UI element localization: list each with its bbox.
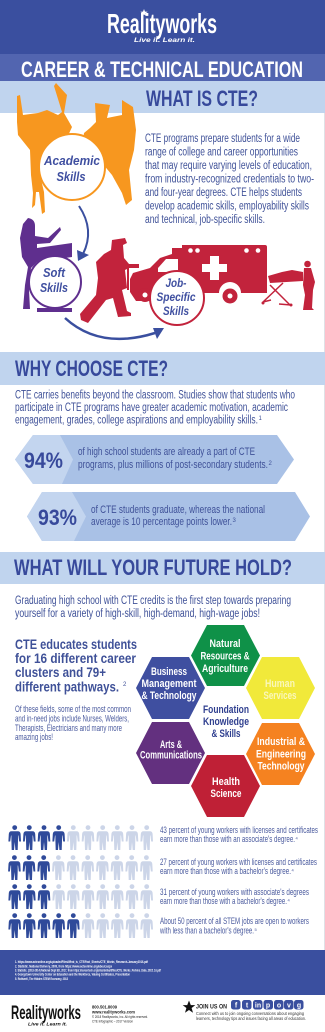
stat: 94 percent: 94% (24, 448, 63, 473)
footer references band: 3. Statistic. (2013-2014) National Dept ED, 2017, from https://careertech.org/sites/default/files/CTE_Works_Perkins_Data_2015_16.pdf (15, 968, 161, 972)
arrow: academic to soft (77, 206, 89, 261)
circle: soft skills (29, 256, 81, 308)
circle: job-specific skills: Skills (163, 306, 189, 318)
hexagon: human services: Human (265, 678, 295, 690)
section heading: why choose CTE (0, 352, 325, 385)
callout: career clusters: CTE educates students (15, 637, 137, 652)
stat: 93 percent: of CTE students graduate, whereas the national (91, 504, 265, 516)
text: what is CTE description: and technical, job-specific skills. (145, 214, 265, 226)
hexagon: natural resources: Agriculture (202, 663, 248, 675)
join us on social row: p (266, 1002, 270, 1010)
pictogram row: 31 percent (8, 884, 153, 909)
text: in-demand jobs note: and in-need jobs include Nurses, Welders, (15, 714, 129, 724)
label: foundation knowledge and skills: Foundation (203, 704, 249, 716)
circle: job-specific skills: Specific (156, 292, 196, 304)
circle: soft skills: Skills (40, 280, 68, 295)
join us on social row: t (246, 1002, 249, 1010)
circle: soft skills: Soft (43, 265, 66, 280)
text: 50 percent statistic: 5 (254, 927, 258, 932)
text: in-demand jobs note: Of these fields, some of the most common (15, 704, 131, 715)
join us on social row: g (297, 1002, 301, 1010)
icon: firefighter silhouette (80, 238, 139, 323)
hexagon: natural resources (191, 625, 260, 686)
hexagon: industrial and engineering (246, 723, 315, 785)
section heading: what is CTE (0, 81, 325, 113)
text: 50 percent statistic (159, 916, 309, 936)
callout: career clusters: 2 (123, 682, 127, 688)
label: foundation knowledge and skills: & Skills (212, 728, 240, 740)
text: 50 percent statistic: with less than a bachelor's degree. (159, 926, 254, 936)
stat: 93 percent (27, 492, 310, 541)
hexagon: business management: & Technology (142, 690, 197, 702)
label: foundation knowledge and skills (203, 704, 249, 740)
header band with logo: Live it. Learn it. (134, 38, 195, 44)
join us on social row: JOIN US ON (196, 1004, 227, 1010)
section heading: why choose CTE: WHY CHOOSE CTE? (15, 356, 168, 381)
icon: graduates silhouette (17, 83, 136, 214)
hexagon: natural resources: Natural (210, 638, 240, 650)
callout: career clusters: different pathways. (15, 680, 119, 694)
hexagon: human services: Services (264, 690, 296, 702)
circle: job-specific skills: Job- (166, 278, 187, 290)
hexagon: industrial and engineering: Industrial & (257, 736, 305, 748)
stat: 93 percent: 3 (232, 518, 236, 524)
stat: 94 percent: of high school students are already a part of CTE (78, 446, 255, 458)
join us on social row: in (255, 1002, 261, 1010)
hexagon: health science: Health (212, 776, 240, 788)
text: what is CTE description (145, 133, 314, 226)
join us on social row: f (235, 1002, 238, 1010)
hexagon: human services (246, 657, 315, 719)
footer contact details: CTE Infographic – 2017 Version (92, 1020, 133, 1024)
circle: academic skills: Skills (56, 169, 86, 184)
circle: academic skills (39, 134, 105, 200)
join us on social row: v (287, 1002, 291, 1010)
join us on social row (183, 1000, 306, 1021)
header band with logo (0, 0, 325, 54)
text: 43 percent statistic: 4 (296, 836, 298, 840)
text: in-demand jobs note (15, 704, 131, 743)
stat: 94 percent: programs, plus millions of post-secondary students. (78, 459, 268, 471)
hexagon: arts and communications: Arts & (160, 739, 182, 751)
hexagon: health science: Science (210, 788, 242, 800)
stat: 94 percent (15, 435, 294, 484)
hexagon: arts and communications: Communications (140, 750, 202, 762)
hexagon: natural resources: Resources & (200, 650, 250, 662)
join us on social row: learners, technology tips and issues facing all areas of education. (196, 1016, 306, 1021)
text: 31 percent statistic (160, 887, 309, 906)
stat: 93 percent: 93% (38, 505, 77, 530)
arrow: soft to job-specific (65, 318, 164, 339)
footer contact details: 800.501.8009 (92, 1004, 117, 1010)
footer references band: 2. Statistic. National Delivery, 2009, from https://www.acteonline.org/about.aspx (15, 964, 112, 968)
text: in-demand jobs note: amazing jobs! (15, 732, 53, 743)
footer logo: Live it. Learn it. (28, 1022, 67, 1028)
join us on social row: o (277, 1002, 281, 1010)
footer references band (0, 950, 325, 995)
text: why choose CTE description: 1 (258, 416, 262, 422)
footer logo: Realityworks (11, 1003, 81, 1024)
section heading: what is CTE: WHAT IS CTE? (146, 86, 258, 111)
hexagon: health science (191, 755, 260, 817)
footer references band: 1. https://www.acteonline.org/uploadedFiles/What_is_CTE/Fact_Sheets/CTE_Works_Research-January2016.pdf (15, 959, 148, 964)
stat: 93 percent: average is 10 percentage points lower. (91, 516, 232, 528)
hexagon: arts and communications (136, 722, 205, 784)
hexagon: industrial and engineering: Technology (258, 760, 305, 772)
footer contact details (91, 1004, 148, 1024)
pictogram row: 43 percent (8, 825, 153, 850)
label: foundation knowledge and skills: Knowledge (203, 716, 249, 728)
icon: ambulance with stretcher and medic (130, 245, 315, 310)
footer contact details: www.realityworks.com (91, 1010, 135, 1014)
pictogram row: 27 percent (8, 855, 153, 880)
callout: career clusters (15, 637, 137, 694)
text: 43 percent statistic (160, 825, 318, 844)
footer contact details: © 2018 Realityworks, Inc. All rights reserved. (92, 1015, 148, 1019)
circle: academic skills: Academic (43, 153, 101, 168)
callout: career clusters: clusters and 79+ (15, 665, 106, 680)
circle: job-specific skills (150, 271, 204, 325)
text: future description (15, 595, 291, 620)
text: why choose CTE description (15, 390, 295, 426)
text: in-demand jobs note: Therapists, Electricians and many more (15, 723, 122, 734)
stat: 94 percent: 2 (268, 461, 272, 467)
pictogram row: 50 percent (8, 913, 153, 938)
text: 27 percent statistic: 4 (292, 868, 294, 872)
hexagon: business management: Business (151, 666, 187, 678)
header band with logo: Realityworks (107, 8, 217, 39)
callout: career clusters: for 16 different career (15, 651, 137, 666)
join us on social row: Connect with us to join ongoing conversations about engaging (196, 1011, 305, 1016)
hexagon: business management (136, 657, 205, 719)
footer logo (11, 1003, 81, 1028)
text: 31 percent statistic: 4 (288, 898, 290, 902)
footer references band: 4. Georgetown University Center on Education and the Workforce, Valuing Certificates, Presentation (15, 972, 130, 976)
hexagon: industrial and engineering: Engineering (256, 748, 306, 760)
hexagon: business management: Management (142, 678, 197, 690)
text: 27 percent statistic (160, 857, 317, 876)
icon: speaker at podium silhouette (20, 218, 72, 312)
footer references band: 5. Rothwell, The Hidden STEM Economy, 2013 (15, 976, 68, 981)
